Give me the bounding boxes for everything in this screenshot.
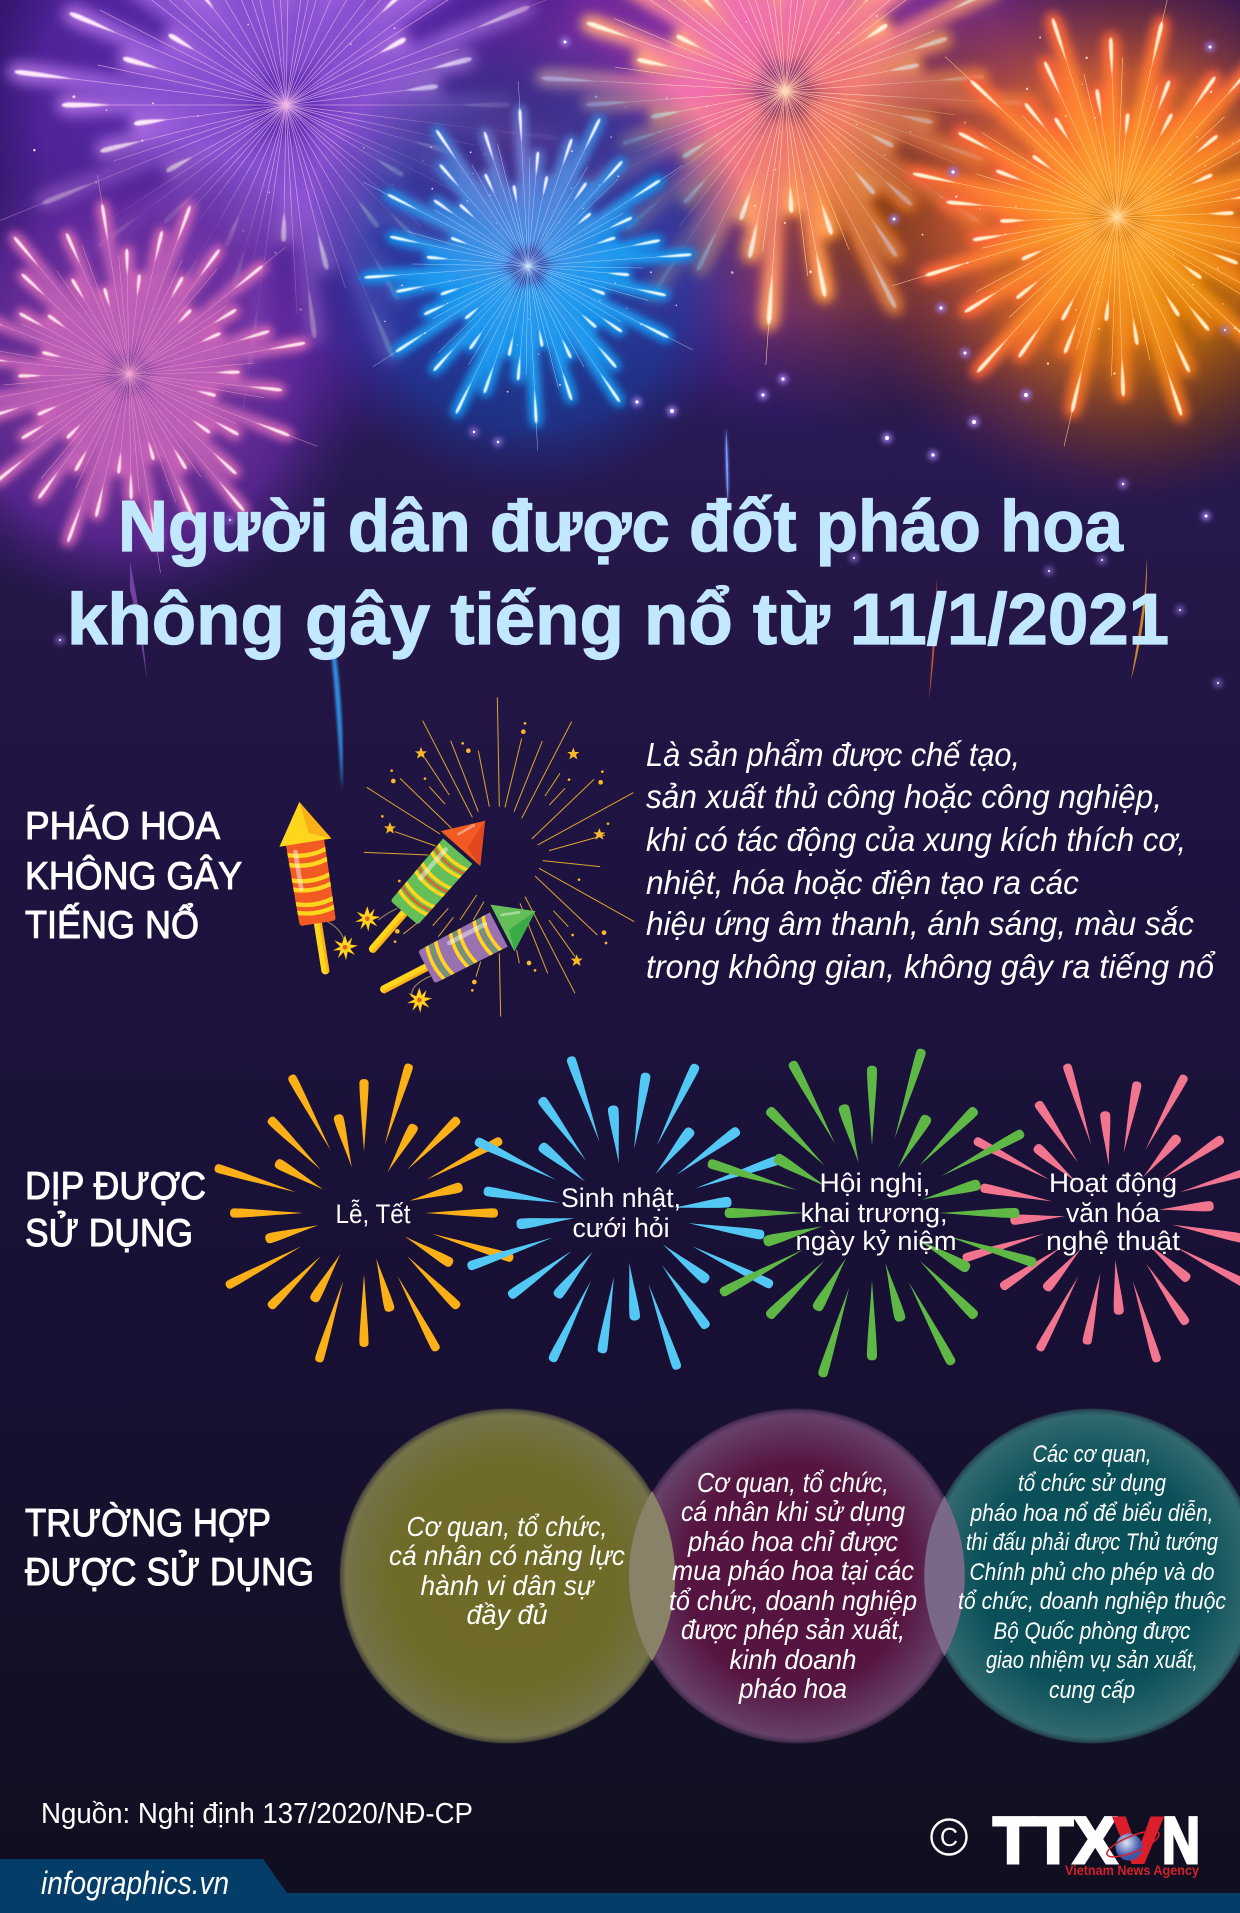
copyright symbol <box>932 1820 966 1854</box>
text: olive circle: Cơ quan, tổ chức, <box>406 1511 608 1542</box>
text: maroon circle: cá nhân khi sử dụng <box>681 1496 905 1527</box>
footer banner <box>0 1859 1240 1913</box>
firework: orange <box>827 0 1240 510</box>
label: Hoạt động văn hóa nghệ thuật: Hoạt động <box>1049 1168 1177 1198</box>
logo: TTXVN: Vietnam News Agency <box>1065 1862 1199 1878</box>
burst: Lễ, Tết <box>214 1063 514 1363</box>
burst: Sinh nhật, cưới hỏi: Sinh nhật, <box>561 1183 681 1213</box>
text: teal circle: cung cấp <box>1049 1677 1135 1704</box>
title: Người dân được đốt pháo hoa <box>118 487 1124 567</box>
label: Hoạt động văn hóa nghệ thuật <box>1046 1168 1181 1256</box>
description paragraph: Là sản phẩm được chế tạo, <box>646 736 1020 773</box>
burst: Hoạt động văn hóa nghệ thuật <box>936 1037 1240 1389</box>
rocket: green body <box>356 820 486 953</box>
title <box>67 487 1169 660</box>
text: teal circle: giao nhiệm vụ sản xuất, <box>986 1647 1198 1674</box>
section label: dịp được sử dụng: DỊP ĐƯỢC <box>25 1165 206 1208</box>
firework: blue <box>298 0 758 496</box>
label: Hoạt động văn hóa nghệ thuật: văn hóa <box>1066 1198 1161 1228</box>
logo: TTXVN: V <box>1113 1803 1163 1877</box>
text: teal circle: pháo hoa nổ để biểu diễn, <box>970 1499 1214 1527</box>
text: teal circle: tổ chức sử dụng <box>1018 1470 1167 1497</box>
logo: TTXVN: N <box>1162 1803 1200 1877</box>
falling sparks and stars <box>59 40 1226 790</box>
section label: pháo hoa không gây tiếng nổ <box>25 805 242 947</box>
description paragraph: hiệu ứng âm thanh, ánh sáng, màu sắc <box>646 905 1194 942</box>
text: maroon circle: được phép sản xuất, <box>681 1614 905 1645</box>
burst: Sinh nhật, cưới hỏi <box>442 1031 806 1395</box>
text: olive circle <box>389 1511 625 1630</box>
text: maroon circle: Cơ quan, tổ chức, <box>697 1467 889 1498</box>
firework: pink and orange <box>445 0 1125 440</box>
burst: Hội nghị, khai trương, ngày kỷ niệm: khai trương, <box>800 1198 948 1228</box>
description paragraph: khi có tác động của xung kích thích cơ, <box>646 821 1186 858</box>
section label: pháo hoa không gây tiếng nổ: TIẾNG NỔ <box>25 902 199 947</box>
section label: pháo hoa không gây tiếng nổ: KHÔNG GÂY <box>25 854 242 898</box>
logo: TTXVN: TTX <box>993 1803 1117 1877</box>
burst: Hội nghị, khai trương, ngày kỷ niệm <box>706 1047 1038 1379</box>
fireworks header <box>0 0 1240 790</box>
footer banner: infographics.vn <box>41 1865 229 1901</box>
text: olive circle: đầy đủ <box>466 1599 548 1630</box>
description paragraph: nhiệt, hóa hoặc điện tạo ra các <box>646 864 1079 901</box>
burst: Hội nghị, khai trương, ngày kỷ niệm: ngày kỷ niệm <box>796 1226 956 1256</box>
label: Hoạt động văn hóa nghệ thuật: nghệ thuật <box>1046 1226 1181 1256</box>
title: không gây tiếng nổ từ 11/1/2021 <box>67 580 1169 660</box>
section label: dịp được sử dụng <box>25 1165 206 1255</box>
rockets illustration <box>273 697 634 1017</box>
source: Nguồn: Nghị định 137/2020/NĐ-CP <box>41 1798 473 1830</box>
rocket: orange body <box>279 802 358 974</box>
text: maroon circle: pháo hoa chỉ được <box>687 1526 898 1557</box>
text: maroon circle: tổ chức, doanh nghiệp <box>669 1585 917 1616</box>
section label: dịp được sử dụng: SỬ DỤNG <box>25 1211 193 1255</box>
burst: Hội nghị, khai trương, ngày kỷ niệm: Hội nghị, <box>820 1168 930 1198</box>
text: maroon circle: mua pháo hoa tại các <box>672 1555 914 1586</box>
text: olive circle: cá nhân có năng lực <box>389 1540 625 1571</box>
text: teal circle <box>958 1441 1226 1704</box>
text: maroon circle: kinh doanh <box>730 1644 856 1675</box>
text: teal circle: Các cơ quan, <box>1032 1441 1152 1468</box>
gold sparkle rays <box>364 697 634 1017</box>
text: teal circle: Bộ Quốc phòng được <box>994 1618 1190 1645</box>
text: olive circle: hành vi dân sự <box>420 1570 596 1601</box>
description paragraph: sản xuất thủ công hoặc công nghiệp, <box>646 778 1162 815</box>
firework: purple <box>0 0 636 468</box>
firework: lower purple <box>0 128 369 620</box>
logo: TTXVN <box>993 1803 1200 1878</box>
burst: Lễ, Tết: Lễ, Tết <box>336 1198 411 1229</box>
rocket: purple body <box>380 904 536 1012</box>
copyright symbol: C <box>940 1822 958 1852</box>
text: maroon circle: pháo hoa <box>738 1673 847 1704</box>
burst: Sinh nhật, cưới hỏi: cưới hỏi <box>572 1213 670 1243</box>
overlapping circles <box>339 1408 1240 1744</box>
section label: pháo hoa không gây tiếng nổ: PHÁO HOA <box>25 805 220 848</box>
text: maroon circle <box>669 1467 917 1704</box>
description paragraph <box>646 736 1216 985</box>
section label: trường hợp được sử dụng <box>25 1502 314 1594</box>
description paragraph: trong không gian, không gây ra tiếng nổ <box>646 948 1216 985</box>
section label: trường hợp được sử dụng: ĐƯỢC SỬ DỤNG <box>25 1550 314 1594</box>
section label: trường hợp được sử dụng: TRƯỜNG HỢP <box>25 1502 271 1545</box>
